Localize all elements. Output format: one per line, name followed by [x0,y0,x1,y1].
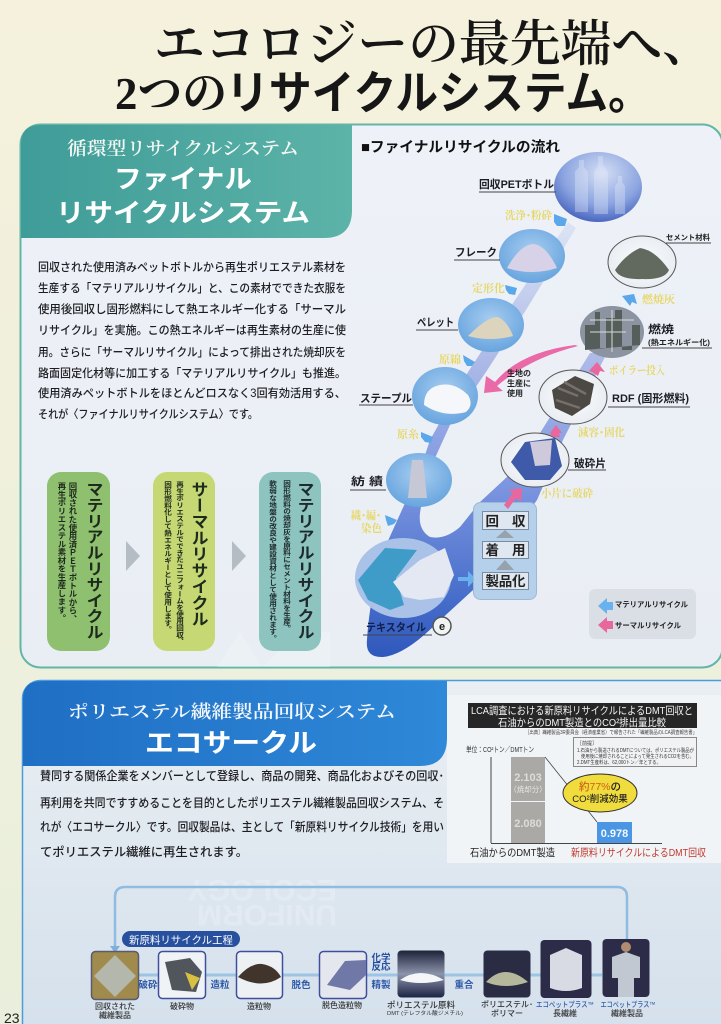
LCA heading [468,703,697,729]
bar chart: 2.103 [514,772,542,784]
label: chemical reaction and refining: 精製 [371,979,391,991]
label: chemical reaction and refining: 化学 [371,952,391,964]
step: granules [236,952,282,1011]
label: yarn: 原糸 [397,427,420,441]
notes box: 2.DMT生産料は、62,000トン／年とする。 [577,759,661,766]
step: textile products [600,939,656,1018]
step: polyester polymer: ポリマー [491,1009,523,1018]
card: material recycle 1 [47,472,110,651]
label: weaving and dyeing: 染色 [361,521,382,535]
box: recovery cycle: 回 収 [486,514,526,529]
step: polyester raw material: DMT (テレフタル酸ジメチル) [387,1009,463,1017]
title: 2つの [115,68,227,119]
node: crushed pieces [501,433,606,487]
panel header: teal: ファイナル [114,164,252,194]
notes box: ［前提］ [577,740,597,747]
notes box: 使用後に焼却されることによって発生されるCO2を含む。 [581,753,694,760]
step: collected textile products [92,952,138,1020]
label: spun yarn: 原綿 [439,352,461,366]
eco circle text block: てポリエステル繊維に再生されます。 [40,844,248,859]
step: crushed material: 破砕物 [170,1001,194,1011]
node: RDF: RDF (固形燃料) [612,391,689,405]
flow band [367,222,607,657]
step: long fiber: 長繊維 [553,1008,577,1018]
arrow: to RDF [550,425,562,437]
node: combustion: (熱エネルギー化) [648,337,710,347]
card: material recycle 2: 軟弱な地盤の改良や建設資材として使用されます。 [268,479,278,642]
notes box [574,738,696,766]
intro text block [38,260,346,421]
node: spinning [350,453,452,507]
callout: thermal energy used for textile production: 生産に [507,378,531,388]
step: long fiber [536,940,594,1018]
card: material recycle 1: 再生ポリエステル素材を生産します。 [57,482,67,622]
intro text block: 生産する「マテリアルリサイクル」と、この素材でできた衣服を [38,281,346,295]
card: thermal recycle: 固形燃料化して熱エネルギーとして使用します。 [163,481,172,633]
eco circle text block: れが〈エコサークル〉です。回収製品は、主として「新原料リサイクル技術」を用い [40,819,444,834]
process label: 新原料リサイクル工程 [129,934,233,946]
callout: thermal energy used for textile production [484,345,578,398]
step: polyester polymer [481,950,533,1018]
card: thermal recycle: 再生ポリエステルでできたユニフォームを使用回収、 [175,481,184,645]
bar chart [466,744,706,859]
title: エコロジーの最先端へ、 [154,16,713,72]
panel header: teal: 循環型リサイクルシステム [67,139,299,160]
callout: 77 percent reduction [563,774,637,812]
node: pellet [416,298,524,352]
node: RDF [539,370,690,424]
intro text block: それが〈ファイナルリサイクルシステム〉です。 [38,407,258,421]
arrow: to cement [622,294,637,306]
card: material recycle 2: マテリアルリサイクル [294,481,314,640]
label: weaving and dyeing [351,508,382,535]
step: granules: 造粒物 [247,1001,271,1011]
intro text block: 使用済みペットボトルをほとんどロスなく3回有効活用する、 [38,386,346,400]
panel header: blue: ポリエステル繊維製品回収システム [68,702,396,722]
legend [589,589,696,639]
card: thermal recycle: サーマルリサイクル [188,481,208,627]
step: collected textile products: 回収された [95,1002,135,1011]
node: combustion: 燃焼 [648,322,674,336]
node: spinning: 紡 績 [351,474,383,488]
label: chemical reaction and refining: 反応 [371,962,391,973]
label: polymerize: 重合 [454,979,474,991]
step: polyester polymer: ポリエステル･ [481,1000,533,1009]
node: PET bottles: 回収PETボトル [479,178,554,191]
eco circle text block: 賛同する関係企業をメンバーとして登録し、商品の開発、商品化およびその回収･ [40,768,444,783]
arrow: to pellet [505,285,517,295]
node: textile [355,538,454,635]
node: textile: テキスタイル [366,621,426,634]
LCA heading: LCA調査における新原料リサイクルによるDMT回収と [471,704,693,717]
node: crushed pieces: 破砕片 [574,456,606,470]
box: recovery cycle: 製品化 [486,574,526,589]
watermark wedge [217,632,330,667]
card: thermal recycle [153,472,215,651]
step: polyester raw material: ポリエステル原料 [387,1000,455,1010]
step: decolored granules: 脱色造粒物 [322,1000,362,1010]
arrow: boiler input [589,362,605,376]
node: textile: e [439,621,445,633]
step: textile products: エコペットプラス™ [600,1000,656,1009]
arrow: textile to products [458,571,476,587]
watermark: UNIFORM [197,898,337,931]
panel header: blue: エコサークル [145,728,317,758]
heading: flow: ■ファイナルリサイクルの流れ [361,139,560,156]
callout: thermal energy used for textile production: 生地の [507,368,531,378]
panel: eco circle [22,680,721,1024]
card: material recycle 2: 固形燃料の焼却灰を原料にセメント材料を生産。 [282,480,292,632]
panel: final recycle system [20,124,721,668]
intro text block: 回収された使用済みペットボトルから再生ポリエステル素材を [38,260,346,274]
arrow: to spinning [421,432,433,443]
panel header: teal: リサイクルシステム [56,198,310,228]
arrow: step 2 to 3 [232,541,246,571]
card: material recycle 2 [259,472,321,651]
bar chart: （焼却分） [509,784,547,794]
node: staple [359,367,478,425]
card: material recycle 1: マテリアルリサイクル [84,481,102,640]
watermark [187,873,337,931]
label: boiler input: ボイラー投入 [609,363,665,377]
bar chart: 0.978 [601,828,628,840]
panel header: blue [23,681,447,766]
label: crush: 破砕 [138,979,158,991]
title: リサイクルシステム。 [226,67,651,119]
arrow: to crushed pieces [504,488,522,509]
label: wash and crush: 洗浄･粉砕 [505,208,552,222]
label: weaving and dyeing: 織･編･ [351,508,381,522]
return loop arrow [115,887,627,947]
process label [122,931,240,947]
watermark: ECOLOGY [187,873,337,906]
step: crushed material [158,952,206,1011]
node: combustion [580,306,712,358]
connector line [138,974,602,976]
process flow: new material recycling [92,887,656,1020]
label: melt and solidify: 減容･固化 [578,425,625,439]
intro text block: 使用後回収し固形燃料にして熱エネルギー化する「サーマル [38,302,346,316]
card: material recycle 1: 回収された使用済ＰＥＴボトルから、 [68,482,78,623]
callout: 77 percent reduction: 約77%の [579,780,621,793]
arrow: to textile [385,515,397,526]
eco circle text block [40,768,444,859]
label: decolor: 脱色 [291,979,311,991]
legend: サーマルリサイクル [615,620,681,630]
step: collected textile products: 繊維製品 [99,1010,131,1020]
callout: 77 percent reduction: CO²削減効果 [572,793,628,805]
step: polyester raw material [387,950,463,1017]
node: cement material: セメント材料 [666,233,711,242]
label: crush into pieces: 小片に破砕 [541,486,593,500]
node: PET bottles [479,152,642,222]
legend: マテリアルリサイクル [615,599,688,609]
flow diagram [350,139,712,657]
callout: thermal energy used for textile production: 使用 [507,388,523,398]
bar chart: 2.080 [514,818,542,830]
intro text block: 用。さらに「サーマルリサイクル」によって排出された焼却灰を [38,345,346,359]
panel: LCA comparison [447,695,721,863]
step: textile products: 繊維製品 [611,1008,643,1018]
bar chart: 単位：CO²トン／DMTトン [466,744,534,754]
intro text block: 路面固定化材等に加工する「マテリアルリサイクル」も推進。 [38,366,346,380]
node: flake [454,229,565,283]
label: forming: 定形化 [472,281,505,295]
node: flake: フレーク [455,246,497,259]
eco circle text block: 再利用を共同ですすめることを目的としたポリエステル繊維製品回収システム、そ [40,795,444,810]
label: chemical reaction and refining [371,952,391,991]
box: recovery cycle: 着 用 [486,543,526,558]
intro text block: リサイクル」を実施。この熱エネルギーは再生素材の生産に使 [38,323,346,337]
label: granulate: 造粒 [210,979,230,991]
node: cement material [608,233,711,288]
node: staple: ステープル [360,392,412,405]
step: decolored granules [320,952,366,1010]
step: long fiber: エコペットプラス™ [536,1000,594,1009]
bar chart: 石油からのDMT製造 [470,846,555,859]
title [115,16,713,119]
panel header: teal [21,125,352,238]
arrow: to flake [554,214,567,226]
LCA heading: 石油からのDMT製造とのCO²排出量比較 [498,716,666,729]
label: ash: 燃焼灰 [641,292,675,306]
arrow: to staple [463,355,475,366]
node: pellet: ペレット [417,317,454,329]
box: recovery cycle [474,502,536,600]
notes box: 1.石油から製造されるDMTについては、ポリエステル製品が [577,747,694,754]
arrow: step 1 to 2 [126,541,140,571]
